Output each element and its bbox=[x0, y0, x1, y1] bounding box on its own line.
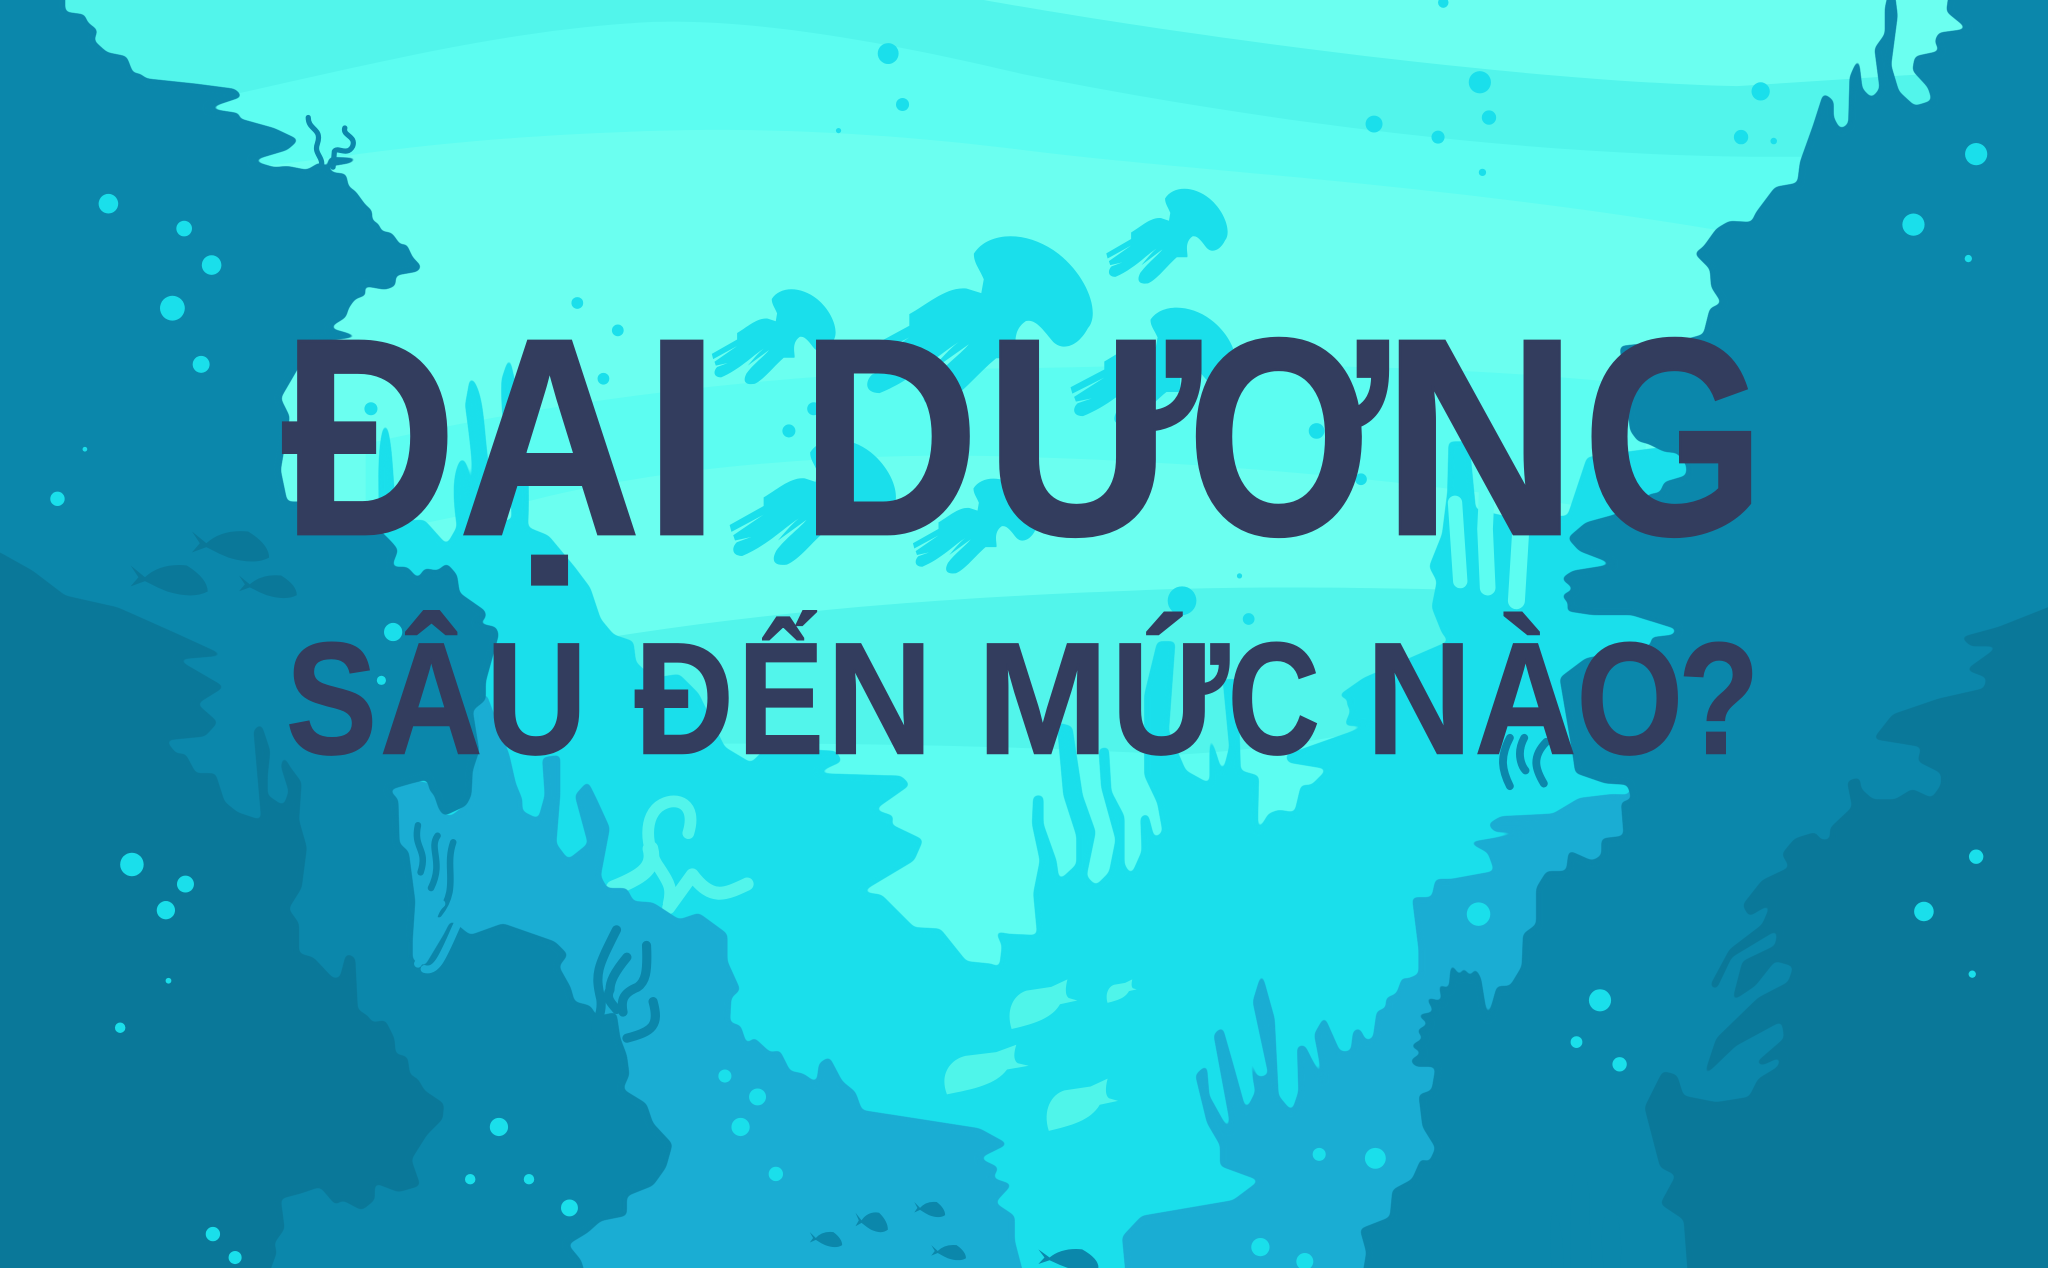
light fish group bbox=[944, 979, 1137, 1131]
title line 1: Đ bbox=[282, 280, 456, 594]
title line 1: D bbox=[801, 280, 979, 594]
seaweed on blue reef left bbox=[417, 825, 655, 1038]
mid-tone reef layer with kelp bbox=[0, 355, 1829, 1268]
title line 2: M bbox=[977, 610, 1108, 787]
title line 2: N bbox=[1366, 610, 1472, 787]
title line 2: Ế bbox=[738, 610, 824, 787]
title line 2: Â bbox=[380, 610, 482, 787]
title line 1: Ư bbox=[985, 280, 1204, 594]
title line 2: N bbox=[827, 610, 933, 787]
curl sea plant bbox=[614, 801, 747, 908]
title line 2: U bbox=[486, 610, 587, 787]
small fish lower center bbox=[810, 1202, 1098, 1268]
blue reef layer left bbox=[0, 692, 1032, 1268]
darkest reef layer left bbox=[0, 542, 444, 1268]
small dark kelp on mid layer bbox=[1503, 738, 1546, 786]
title line 2: O bbox=[1576, 610, 1683, 787]
title line 2: Đ bbox=[635, 610, 734, 787]
blue reef layer right bbox=[1122, 784, 1698, 1268]
light bands in the water bbox=[0, 0, 1959, 1045]
title line 1: I bbox=[643, 280, 721, 594]
title line 2: À bbox=[1475, 610, 1576, 787]
dark reef layer right bbox=[1357, 0, 2048, 1268]
title line 2: ? bbox=[1678, 610, 1759, 787]
soft light creature shapes behind the reef bbox=[679, 896, 910, 1136]
dark reef layer left bbox=[0, 0, 673, 1268]
title line 1: Ạ bbox=[458, 280, 641, 594]
seaweed at top left reef bbox=[308, 118, 353, 167]
jellyfish group bbox=[712, 189, 1236, 574]
pale kelp fingers bbox=[1455, 444, 1522, 601]
title line 1: G bbox=[1583, 280, 1765, 594]
title line 2: Ứ bbox=[1112, 610, 1230, 787]
title line 2: S bbox=[286, 610, 377, 787]
title bbox=[282, 280, 1765, 787]
title line 1: N bbox=[1382, 280, 1578, 594]
seaweed blades lower right bbox=[1550, 1167, 1621, 1268]
title line 2: C bbox=[1228, 610, 1320, 787]
darkest reef layer right bbox=[1644, 588, 2048, 1268]
dark fish left bbox=[131, 531, 297, 598]
bubbles in open water bbox=[571, 0, 1777, 625]
title line 1: Ơ bbox=[1187, 280, 1390, 594]
